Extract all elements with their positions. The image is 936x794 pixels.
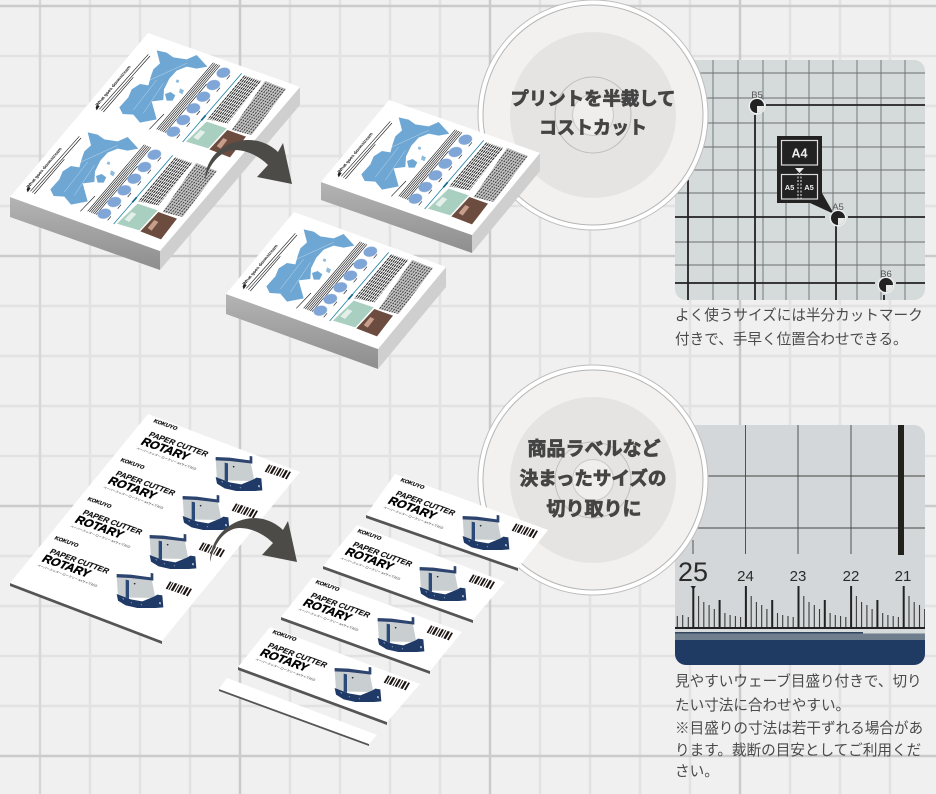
label row 2: ROTARY — [105, 474, 160, 502]
label row 4: ペーパーカッター ロータリー A4サイズ対応 — [36, 563, 100, 588]
mark: B5: B5 — [751, 90, 763, 101]
stack top sheet — [10, 33, 300, 251]
panel: cut A5 stack, upper — [321, 100, 540, 253]
callout circle: half cut — [478, 0, 708, 230]
mark: A5: A5 — [832, 202, 844, 213]
photo: wave scale — [675, 425, 925, 665]
label row 1: ペーパーカッター ロータリー A4サイズ対応 — [135, 446, 199, 471]
caption: wave scale: さい。 — [675, 763, 719, 780]
label row 4 — [36, 536, 192, 608]
callout circle: half cut: コストカット — [539, 118, 647, 138]
panel: cut label 2: ROTARY — [342, 545, 397, 573]
panel: cut label 4: PAPER CUTTER — [266, 641, 329, 669]
panel: cut A5 stack, lower — [226, 212, 446, 369]
label row 4: ROTARY — [39, 552, 94, 580]
printed page: lower half: What goes downstream — [25, 147, 63, 188]
label row 1: ROTARY — [138, 435, 193, 463]
panel: uncut label sheet — [10, 414, 300, 644]
photo: cutting board with half-cut marks — [675, 60, 925, 300]
label row 1: KOKUYO — [152, 419, 179, 432]
panel: cut label 2 — [323, 525, 505, 623]
panel: cut label 4: KOKUYO — [271, 630, 298, 643]
panel: cut label 1 — [366, 474, 548, 571]
callout: A4 to A5: A4 — [792, 146, 808, 160]
label row 2: PAPER CUTTER — [114, 469, 177, 497]
panel: cut label 4 — [238, 627, 420, 725]
caption: wave scale: ※目盛りの寸法は若干ずれる場合があ — [675, 720, 923, 737]
caption: wave scale: ります。裁断の目安としてご利用くだ — [675, 742, 921, 759]
arrow: A4 stack to A5 stacks — [205, 140, 292, 184]
panel: cut label 4: ペーパーカッター ロータリー A4サイズ対応 — [254, 657, 318, 682]
label row 2: KOKUYO — [119, 458, 146, 471]
panel: cut label 2: KOKUYO — [356, 529, 383, 542]
callout: A4 to A5: A5 — [804, 183, 814, 192]
label row 3: ペーパーカッター ロータリー A4サイズ対応 — [69, 524, 133, 549]
scale numbers — [679, 562, 911, 582]
arrow: label sheet to cut labels — [210, 518, 297, 562]
callout: A4 to A5 — [777, 136, 834, 214]
panel: cut label 3: KOKUYO — [314, 580, 341, 593]
printed page: lower half — [25, 132, 217, 239]
panel: cut label 3: PAPER CUTTER — [309, 591, 372, 619]
caption: wave scale: たい寸法に合わせやすい。 — [675, 697, 850, 714]
printed page: upper half — [94, 50, 286, 157]
mark: A5 — [830, 202, 846, 226]
caption: wave scale — [675, 672, 923, 780]
printed page — [336, 117, 528, 224]
label row 2: ペーパーカッター ロータリー A4サイズ対応 — [102, 485, 166, 510]
caption: wave scale: 見やすいウェーブ目盛り付きで、切り — [675, 672, 922, 690]
scale numbers: 25 — [678, 557, 708, 587]
label row 3 — [69, 497, 225, 569]
mark: B5 — [748, 90, 766, 114]
panel: cut label 4: ROTARY — [257, 646, 312, 674]
heading: half cut: プリントを半裁して — [511, 88, 675, 109]
label row 4: PAPER CUTTER — [48, 547, 111, 575]
label row 3: KOKUYO — [86, 497, 113, 510]
panel: cut label 3: ペーパーカッター ロータリー A4サイズ対応 — [297, 607, 361, 632]
panel: cut label 3 — [281, 577, 462, 674]
mark: B6: B6 — [880, 269, 892, 280]
panel: cut label 1: KOKUYO — [399, 478, 426, 491]
scale numbers: 23 — [790, 568, 806, 585]
callout circle: labels: 切り取りに — [546, 498, 642, 520]
stack sides — [10, 197, 160, 270]
callout: A4 to A5: A5 — [785, 183, 794, 192]
callout circle: labels — [478, 365, 708, 595]
callout circle: labels: 決まったサイズの — [520, 468, 666, 489]
printed page: upper half: What goes downstream — [94, 65, 132, 106]
panel: large A4 paper stack — [10, 33, 300, 270]
label row 2 — [102, 458, 258, 530]
heading: labels: 商品ラベルなど — [527, 438, 661, 460]
label row 1: PAPER CUTTER — [147, 430, 210, 458]
panel: cut label 2: ペーパーカッター ロータリー A4サイズ対応 — [339, 556, 403, 581]
scale numbers: 21 — [895, 568, 911, 585]
panel: cut label 1: PAPER CUTTER — [394, 489, 457, 517]
caption: half cut marks: 付きで、手早く位置合わせできる。 — [675, 331, 908, 348]
label row 3: ROTARY — [72, 513, 127, 541]
label row 1 — [135, 419, 291, 491]
caption: half cut marks — [675, 307, 923, 348]
panel: cut label 2: PAPER CUTTER — [351, 540, 414, 568]
printed page — [241, 229, 433, 336]
printed page: What goes downstream — [241, 244, 279, 285]
printed page: What goes downstream — [336, 132, 374, 173]
caption: half cut marks: よく使うサイズには半分カットマーク — [675, 307, 923, 324]
panel: cut label 1: ROTARY — [385, 494, 440, 522]
mark: B6 — [878, 269, 894, 294]
scale numbers: 24 — [737, 568, 754, 585]
label row 4: KOKUYO — [53, 536, 80, 549]
scale numbers: 22 — [843, 568, 859, 585]
panel: cut label 1: ペーパーカッター ロータリー A4サイズ対応 — [382, 505, 446, 530]
label row 3: PAPER CUTTER — [81, 508, 144, 536]
panel: cut label 3: ROTARY — [300, 596, 355, 624]
wave ticks — [676, 596, 925, 627]
panel: leftover scrap strip — [219, 678, 377, 746]
